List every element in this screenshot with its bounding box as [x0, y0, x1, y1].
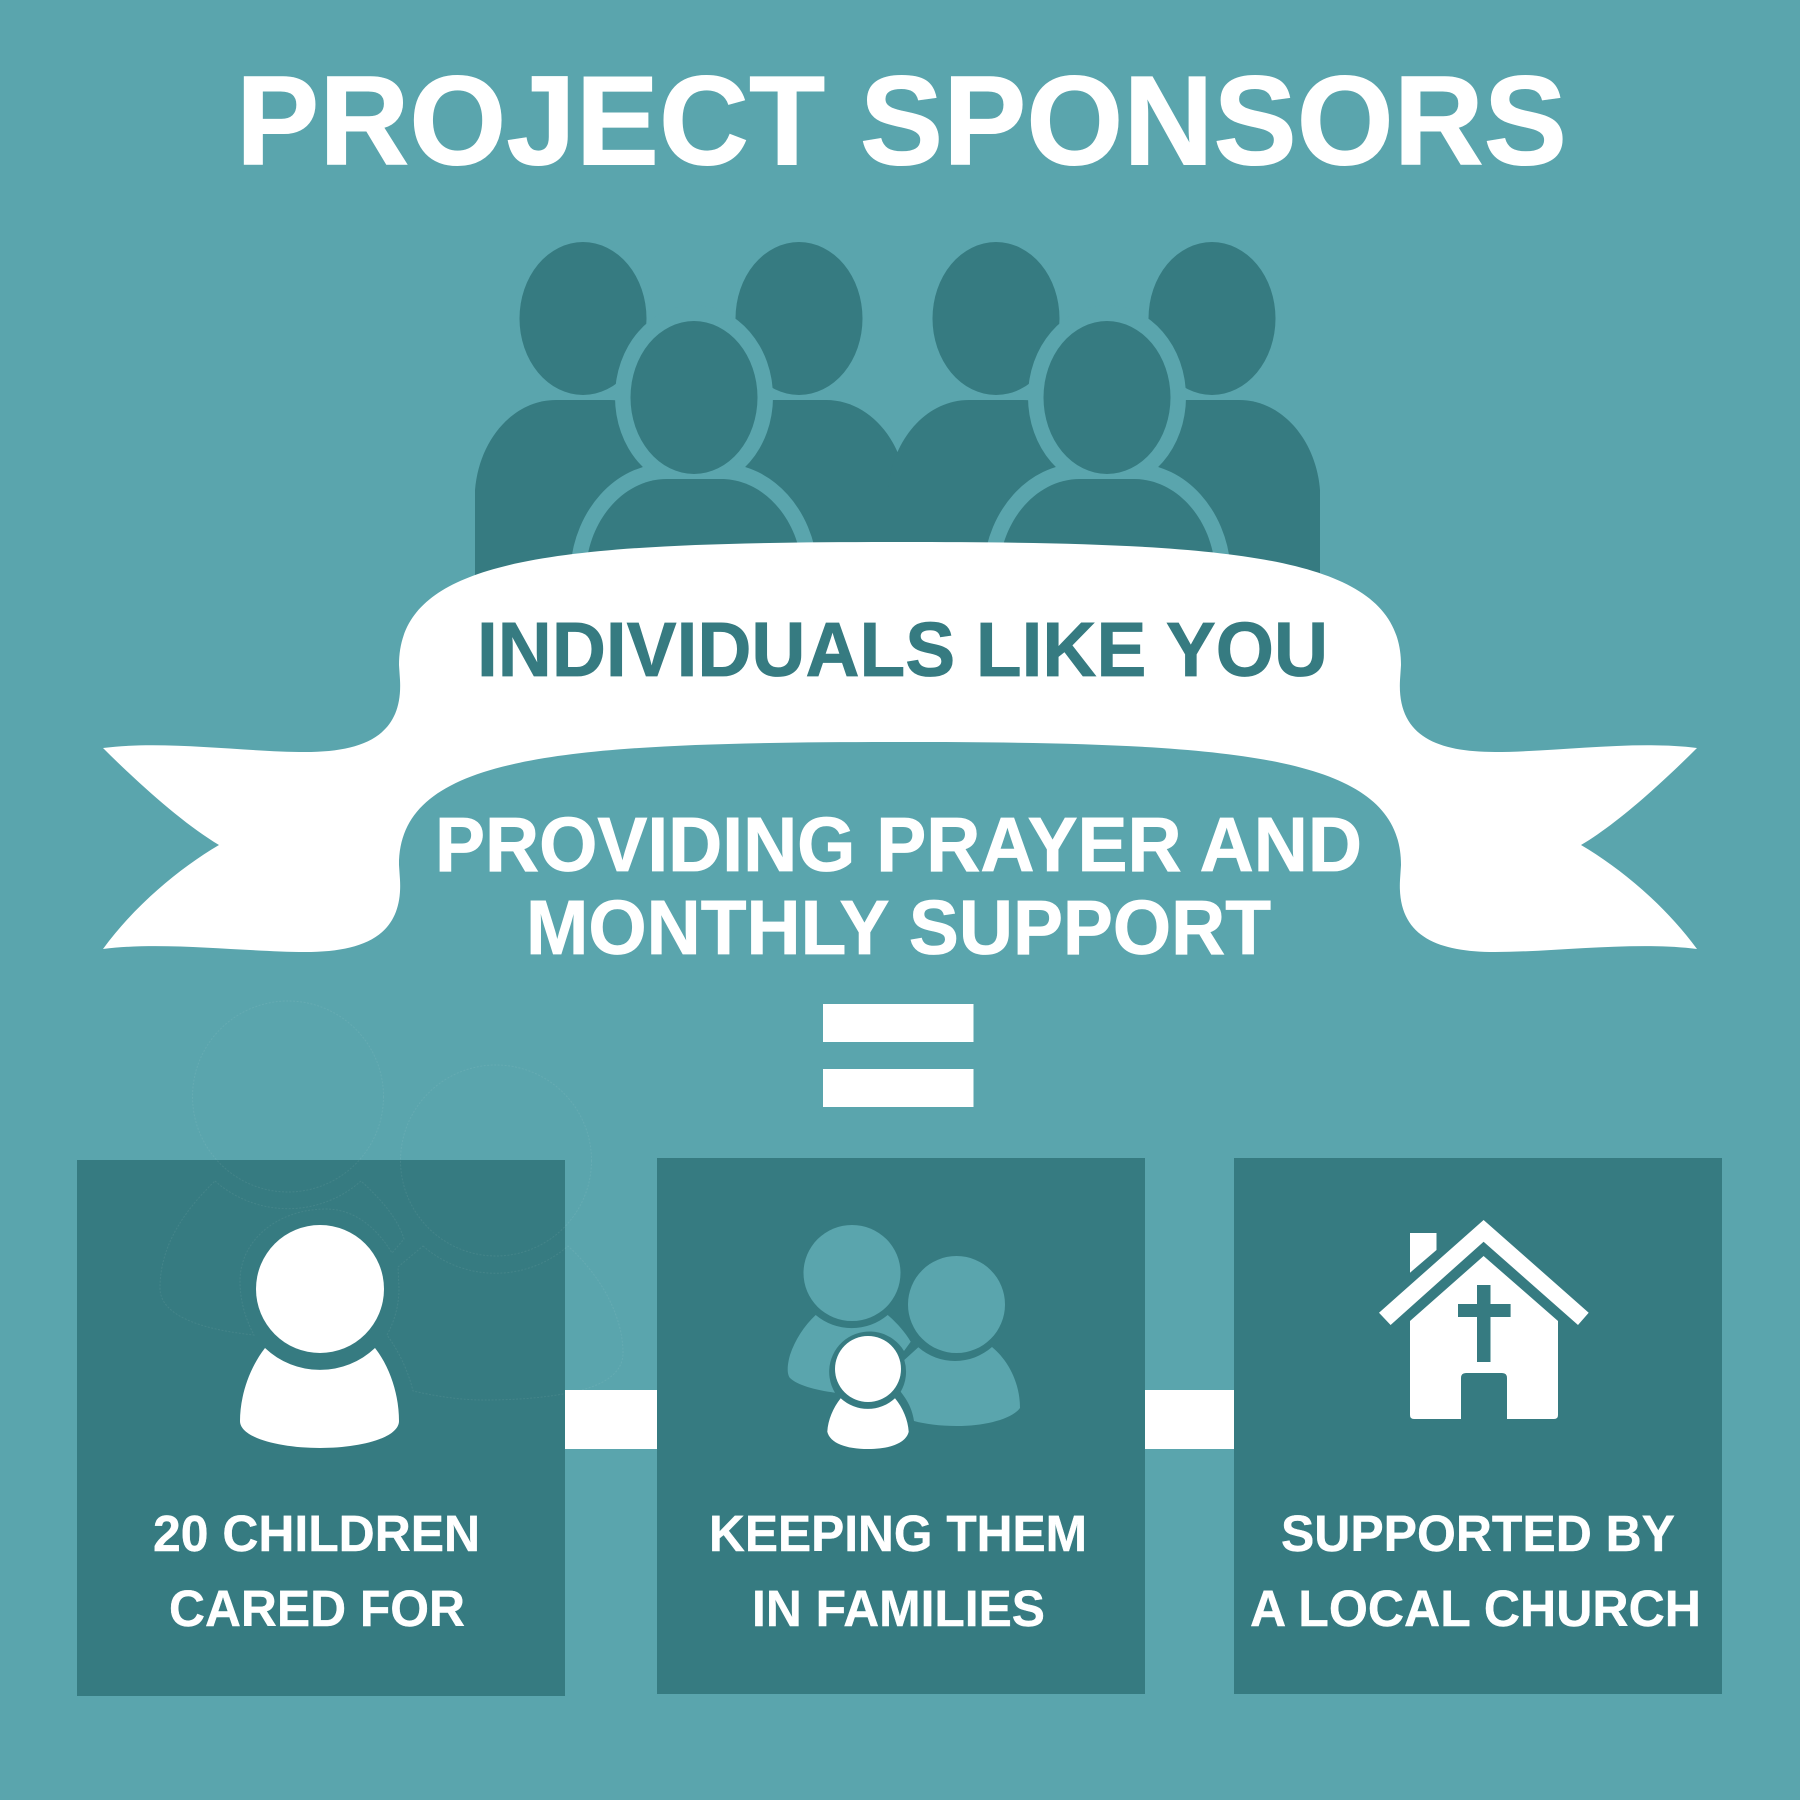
panel label: A LOCAL CHURCH	[1250, 1580, 1701, 1637]
title: PROJECT SPONSORS	[236, 50, 1567, 192]
equals sign	[823, 1004, 974, 1107]
panel label	[709, 1505, 1087, 1637]
back row people	[475, 242, 1320, 600]
front left person	[586, 305, 802, 640]
panel label: SUPPORTED BY	[1281, 1505, 1675, 1562]
connector bars	[565, 1390, 1234, 1449]
icon: child	[240, 1225, 399, 1448]
panel label: 20 CHILDREN	[153, 1505, 480, 1562]
icon: group of five sponsors	[475, 242, 1320, 640]
panel label	[153, 1505, 480, 1637]
panel label: IN FAMILIES	[752, 1580, 1045, 1637]
front right person	[999, 305, 1215, 640]
ribbon heading: INDIVIDUALS LIKE YOU	[477, 607, 1328, 693]
faint ghost outlines of figures	[160, 1001, 623, 1400]
icon: church house	[1379, 1220, 1589, 1419]
panel: keeping them in families	[657, 1158, 1145, 1694]
ribbon banner	[103, 542, 1697, 952]
text block: providing prayer and monthly support	[435, 802, 1362, 971]
text block: providing prayer and monthly support: PROVIDING PRAYER AND	[435, 802, 1362, 888]
text block: providing prayer and monthly support: MONTHLY SUPPORT	[526, 885, 1271, 971]
panel: 20 children cared for	[77, 1001, 623, 1696]
panel: supported by a local church	[1234, 1158, 1722, 1694]
panel label	[1250, 1505, 1701, 1637]
icon: family	[788, 1225, 1020, 1449]
panel label: CARED FOR	[169, 1580, 465, 1637]
panel label: KEEPING THEM	[709, 1505, 1087, 1562]
